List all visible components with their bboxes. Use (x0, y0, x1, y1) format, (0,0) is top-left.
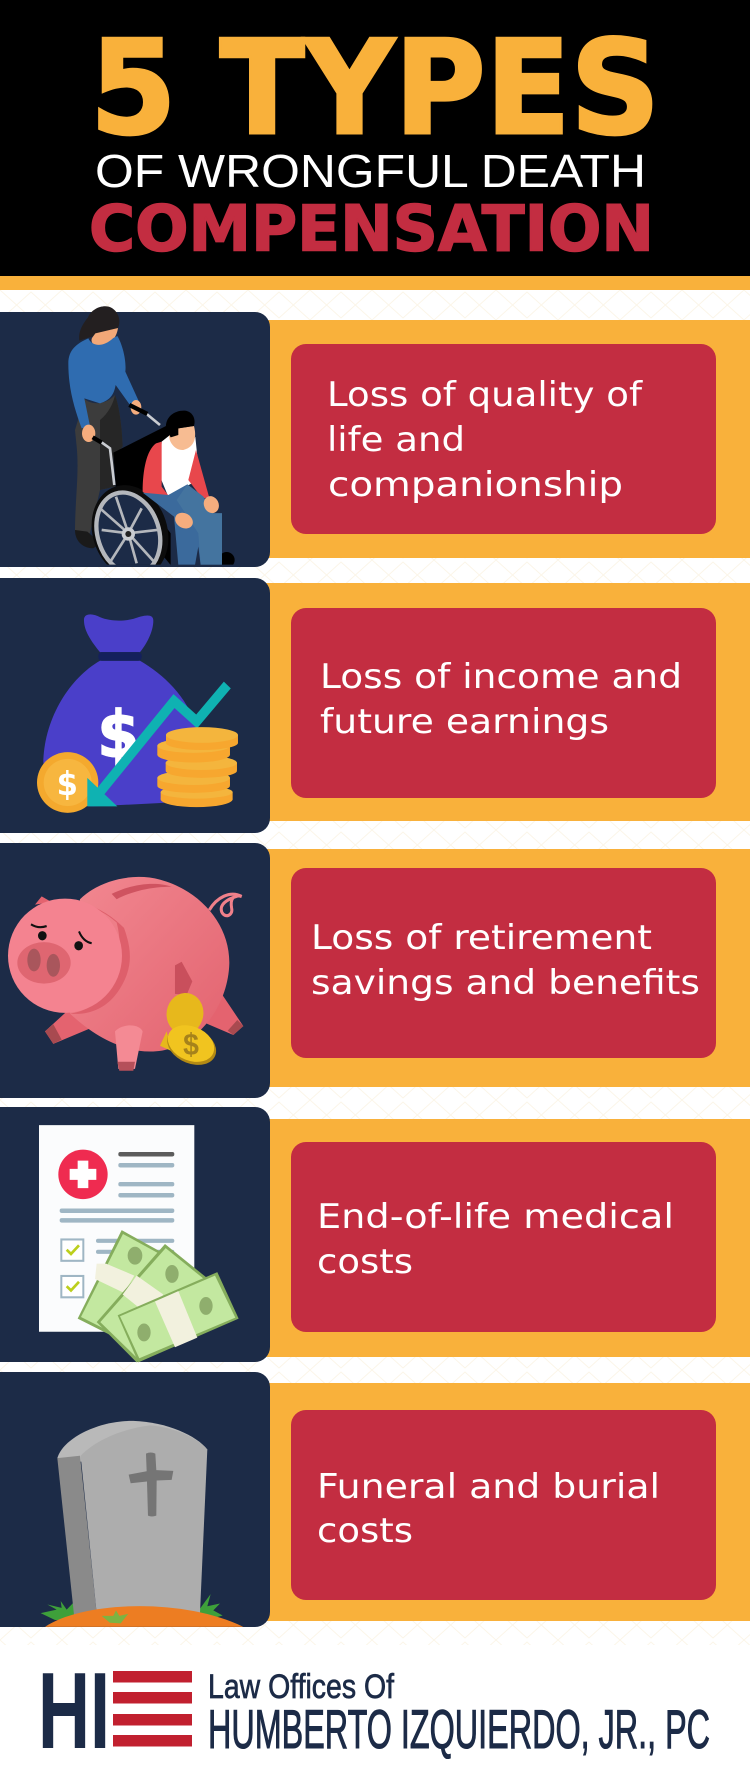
text box 3 (291, 868, 716, 1058)
text box 5: Funeral and burial (317, 1467, 660, 1507)
icon: money bag with falling arrow and coins: $ (57, 766, 78, 803)
text box 1: life and (327, 420, 465, 460)
logo monogram: HI (38, 1650, 110, 1772)
icon: sad piggy bank losing coins: $ (183, 1028, 199, 1062)
text box 2 (291, 608, 716, 798)
text box 1: companionship (328, 465, 623, 505)
icon: caregiver pushing wheelchair (68, 306, 235, 588)
text box 5: costs (317, 1511, 413, 1551)
text box 1: Loss of quality of (327, 375, 643, 415)
footer logo (38, 1650, 710, 1772)
title: compensation: COMPENSATION (89, 192, 654, 266)
icon: gravestone with cross (41, 1421, 243, 1627)
title: of wrongful death: OF WRONGFUL DEATH (95, 145, 646, 197)
icon panel 1 (0, 312, 270, 567)
text box 1 (291, 344, 716, 534)
text box 4: End-of-life medical (317, 1197, 674, 1237)
text box 3: savings and benefits (311, 963, 700, 1003)
text box 4 (291, 1142, 716, 1332)
icon: medical bill with cash bundles (39, 1125, 239, 1362)
icon panel 4 (0, 1107, 270, 1362)
logo firm name small: Law Offices Of (208, 1668, 394, 1706)
text box 2: Loss of income and (320, 657, 682, 697)
header banner (0, 0, 750, 290)
panel: row 3 retirement (0, 843, 750, 1098)
icon panel 2 (0, 578, 270, 833)
icon: sad piggy bank losing coins (8, 877, 243, 1072)
text box 2: future earnings (320, 702, 609, 742)
panel: row 1 quality of life (0, 306, 750, 588)
icon panel 5 (0, 1372, 270, 1627)
text box 3: Loss of retirement (311, 918, 652, 958)
text box 5 (291, 1410, 716, 1600)
panel: row 4 medical costs (0, 1107, 750, 1362)
icon: money bag with falling arrow and coins (37, 614, 238, 813)
text box 4: costs (317, 1242, 413, 1282)
icon panel 3 (0, 843, 270, 1098)
title: 5 types: 5 TYPES (90, 12, 660, 164)
panel: row 5 funeral costs (0, 1372, 750, 1627)
panel: row 2 income (0, 578, 750, 833)
icon: money bag with falling arrow and coins: $ (97, 697, 139, 773)
